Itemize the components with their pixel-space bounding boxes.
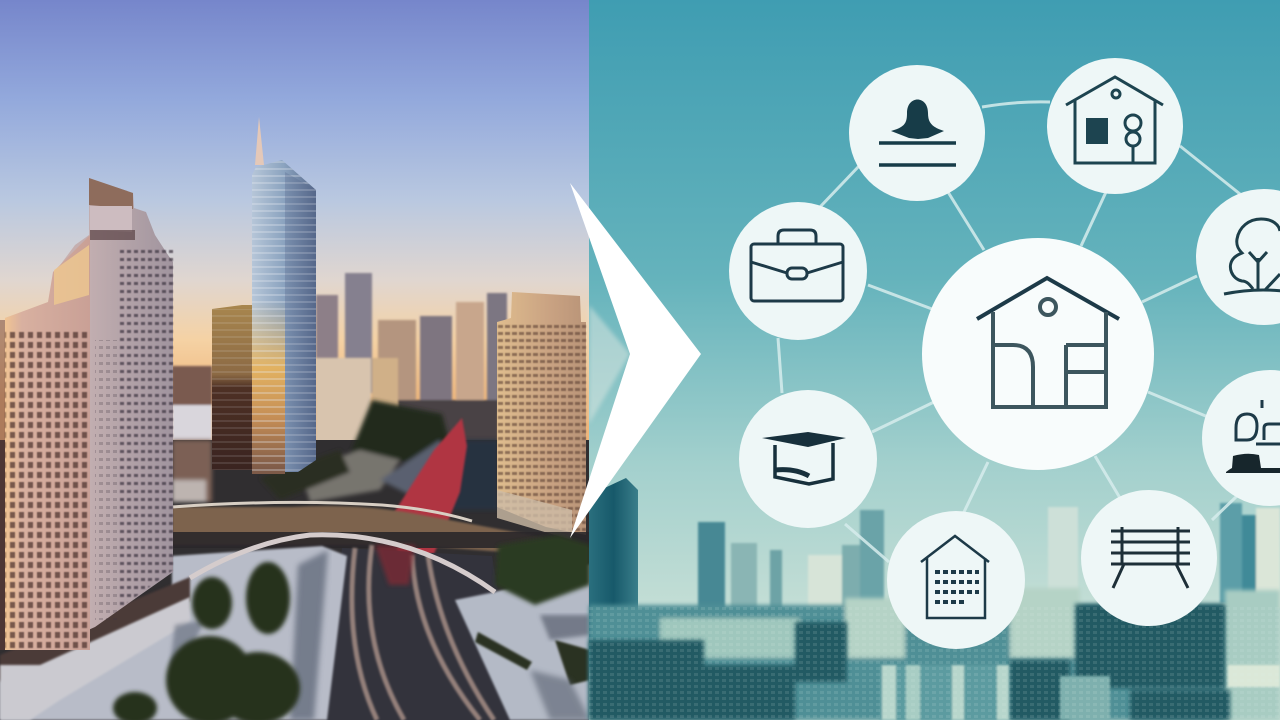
red traffic road <box>388 418 467 558</box>
left dark tower <box>589 478 638 670</box>
icon node: park bench <box>1081 490 1217 626</box>
pale glow behind arrow <box>589 305 630 424</box>
road <box>325 545 520 720</box>
network connectors <box>778 102 1240 562</box>
icon node: school building <box>887 511 1025 649</box>
pale foreground towers <box>880 665 1280 720</box>
icon node: desk and person <box>1202 370 1280 506</box>
ground and mid-distance <box>0 440 590 720</box>
arched footbridge <box>190 535 495 592</box>
distant skyline <box>172 273 507 450</box>
icon node: house with tree <box>1047 58 1183 194</box>
icon node: briefcase <box>729 202 867 340</box>
mid-city band <box>589 588 1280 720</box>
right embankment and greenery <box>455 535 590 720</box>
icon node: graduation cap <box>739 390 877 528</box>
icon node: tree <box>1196 189 1280 325</box>
left embankment <box>0 546 347 720</box>
foreground residential tower <box>0 178 173 650</box>
panel: after, connected city with services <box>589 0 1280 720</box>
right apartment block <box>497 292 586 540</box>
panel: before, conventional high-rise city <box>0 0 592 720</box>
glass skyscraper <box>252 117 316 474</box>
dark office tower <box>212 305 252 470</box>
icon node: person on lines <box>849 65 985 201</box>
arrow: transformation chevron <box>570 183 701 538</box>
hazy skyline <box>698 503 1280 625</box>
icon node: central house <box>922 238 1154 470</box>
trees <box>113 562 300 720</box>
dark foreground blocks <box>589 604 1230 720</box>
bridges <box>172 502 592 555</box>
